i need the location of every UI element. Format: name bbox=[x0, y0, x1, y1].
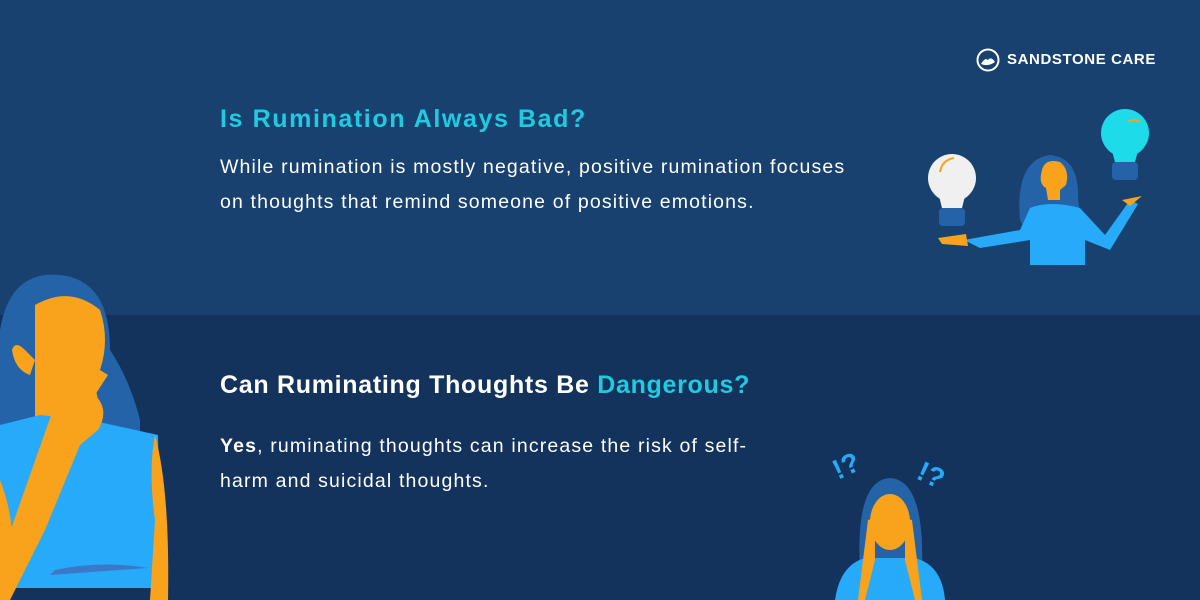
logo: SANDSTONE CARE bbox=[1007, 51, 1156, 68]
icon: white bulb bbox=[928, 154, 976, 226]
text: yes: Yes, ruminating thoughts can increase the risk of self-harm and suicidal thoughts. bbox=[220, 435, 747, 492]
heading: Is Rumination Always Bad?: Is Rumination Always Bad? bbox=[220, 105, 587, 133]
illustration: stressed woman bbox=[827, 450, 950, 600]
logo bbox=[976, 48, 1156, 72]
illustration: stressed woman: !? bbox=[912, 455, 950, 495]
illustration: woman with light bulbs bbox=[928, 109, 1149, 265]
icon: cyan bulb bbox=[1101, 109, 1149, 180]
text: positive rumination: While rumination is mostly negative, positive rumination focuses on thoughts that remind someone of positive emotions. bbox=[220, 156, 845, 213]
heading: dangerous: Can Ruminating Thoughts Be Dangerous? bbox=[220, 371, 750, 399]
illustration: thinking woman bbox=[0, 274, 168, 600]
